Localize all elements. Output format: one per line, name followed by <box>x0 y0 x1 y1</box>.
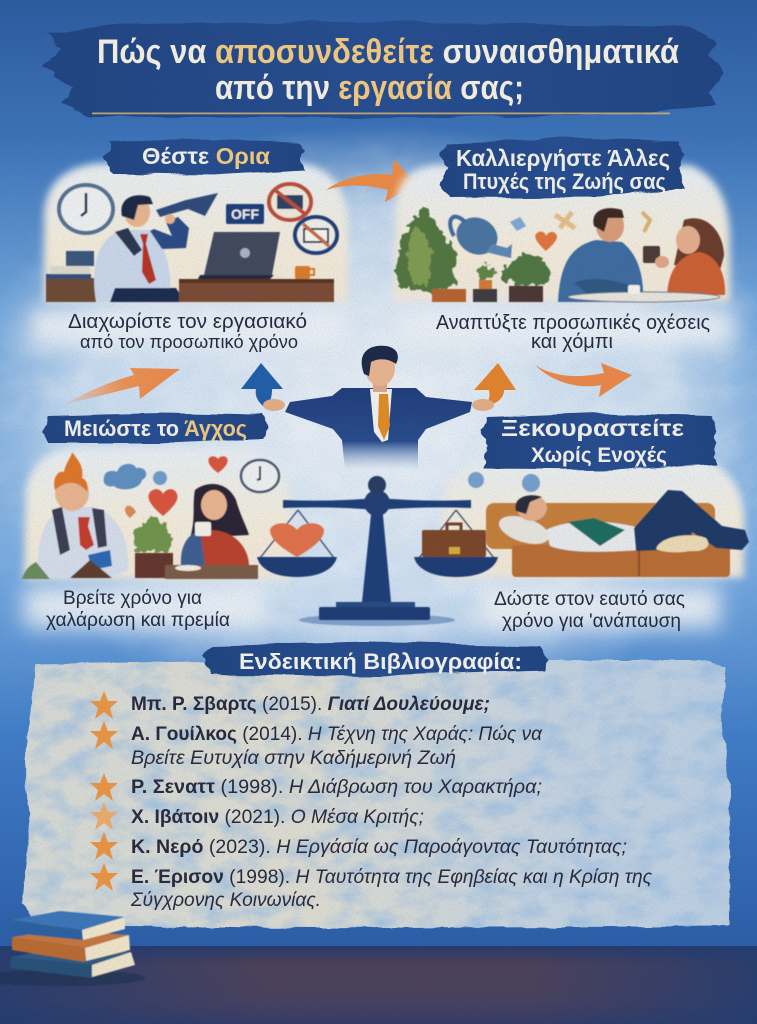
caption: reduce stress: Βρείτε χρόνο για <box>63 588 202 609</box>
icon: OFF badge: OFF <box>231 206 259 222</box>
reference 5 <box>90 832 627 860</box>
arrow: top centre <box>326 159 416 202</box>
table with cup <box>568 285 720 302</box>
reference 6: Ε. Έρισον (1998). Η Ταυτότητα της Εφηβείας και η Κρίση της <box>131 867 653 888</box>
heading: rest without guilt: Χωρίς Ενοχές <box>531 444 667 467</box>
panel: reduce stress <box>22 413 292 631</box>
saucer and cup <box>175 565 201 571</box>
caption: reduce stress: χαλάρωση και πρεμία <box>46 610 230 631</box>
icon: stack of books <box>0 911 145 986</box>
title text: από την εργασία σας; <box>215 69 524 107</box>
reference 2 <box>90 721 543 769</box>
reference 4 <box>90 802 424 830</box>
heading: other aspects of life <box>440 138 684 198</box>
caption: other aspects of life <box>436 312 710 353</box>
small plant two <box>503 253 551 302</box>
title banner <box>42 22 724 118</box>
heading: bibliography: Ενδεικτική Βιβλιογραφία: <box>239 649 522 674</box>
panel: other aspects of life <box>394 138 735 353</box>
icon: no-mail sign two <box>295 217 337 253</box>
heading: other aspects of life: Καλλιεργήστε Άλλες <box>456 145 670 171</box>
heading: set boundaries <box>103 139 305 175</box>
heading: other aspects of life: Πτυχές της Ζωής σας <box>463 169 666 194</box>
orange book <box>12 930 130 962</box>
icon: watering can <box>450 211 512 261</box>
sofa <box>486 503 730 577</box>
right pan <box>414 557 498 577</box>
man with telescope <box>94 193 218 302</box>
businessman <box>263 346 494 470</box>
heading: rest without guilt <box>481 413 717 470</box>
reference 6: Σύγχρονης Κοινωνίας. <box>130 890 321 911</box>
icon: worry clouds <box>104 464 146 489</box>
title text <box>97 33 679 107</box>
caption: rest without guilt: χρόνο για 'ανάπαυση <box>502 611 681 632</box>
caption: reduce stress <box>46 588 230 631</box>
reference 4: Χ. Ιβάτοιν (2021). Ο Μέσα Κριτής; <box>131 807 424 828</box>
icon: heart top <box>208 456 228 473</box>
small plant one <box>473 264 497 302</box>
reference 6 <box>90 863 653 911</box>
reference list <box>90 691 653 911</box>
icon: mug <box>295 266 314 279</box>
heading: reduce stress <box>43 413 268 443</box>
cat <box>656 535 708 552</box>
reference 2: Βρείτε Ευτυχία στην Καδήμερινή Ζωή <box>131 748 456 769</box>
man resting <box>515 490 749 552</box>
woman with cup <box>181 484 249 565</box>
title text: Πώς να αποσυνδεθείτε συναισθηματικά <box>97 33 679 71</box>
arrow: right curved <box>535 363 632 397</box>
reference 1: Μπ. Ρ. Σβαρτς (2015). Γιατί Δουλεύουμε; <box>131 694 490 715</box>
illustration: stressed man and woman <box>22 452 279 579</box>
icon: clock <box>57 183 115 235</box>
icon: heart large <box>149 489 177 516</box>
arrow: orange up <box>474 363 516 406</box>
caption: other aspects of life: Αναπτύξτε προσωπικές οχέσεις <box>436 312 710 334</box>
large plant <box>395 208 466 302</box>
floor <box>0 946 757 1024</box>
icon: briefcase <box>422 524 486 557</box>
icon: heart <box>535 232 557 251</box>
heading: reduce stress: Μειώστε το Άγχος <box>64 416 247 441</box>
left pan <box>257 557 337 577</box>
arrow: blue up <box>241 363 283 407</box>
man with flaming hair <box>22 452 128 579</box>
pillow <box>496 511 552 549</box>
central figure with arrows <box>241 346 516 470</box>
icon: heart on scale <box>270 523 324 557</box>
illustration: plants and couple <box>395 208 725 302</box>
panel: set boundaries <box>30 139 350 352</box>
heading: rest without guilt: Ξεκουραστείτε <box>501 415 684 441</box>
caption: set boundaries: Διαχωρίστε τον εργασιακό <box>68 311 307 333</box>
reference 3 <box>90 773 542 801</box>
reference 3: Ρ. Σεναττ (1998). Η Διάβρωση του Χαρακτήρα; <box>131 777 542 798</box>
blue book <box>11 911 125 940</box>
heading: set boundaries: Θέστε Ορια <box>142 143 270 169</box>
icon: dream clouds <box>468 472 540 492</box>
teal book <box>10 948 135 978</box>
caption: set boundaries: από τον προσωπικό χρόνο <box>80 332 298 352</box>
reference 1 <box>90 691 490 719</box>
illustration: man on sofa <box>468 472 749 577</box>
icon: OFF badge <box>226 204 264 224</box>
panel: rest without guilt <box>440 413 749 632</box>
panel: bibliography parchment <box>22 642 730 928</box>
balance scale <box>257 476 498 626</box>
reference 2: Α. Γουίλκος (2014). Η Τέχνη της Χαράς: Πώς να <box>131 724 543 745</box>
caption: set boundaries <box>68 311 307 352</box>
caption: rest without guilt <box>494 589 685 632</box>
plant and pot <box>133 516 173 578</box>
arrow: left diagonal <box>63 368 180 405</box>
heading: bibliography <box>203 642 548 676</box>
illustration: man at desk <box>46 183 337 302</box>
caption: rest without guilt: Δώστε στον εαυτό σας <box>494 589 685 610</box>
desk <box>179 279 334 302</box>
caption: other aspects of life: και χόμπι <box>531 331 613 353</box>
man in blue shirt <box>558 208 643 302</box>
icon: no-mail sign one <box>269 184 311 220</box>
table <box>165 565 258 579</box>
reference 5: Κ. Νερό (2023). Η Εργάσία ως Παροάγοντας Ταυτότητας; <box>131 837 627 858</box>
icon: laptop <box>198 232 280 279</box>
icon: clock small <box>241 460 279 492</box>
woman in orange <box>643 218 725 296</box>
